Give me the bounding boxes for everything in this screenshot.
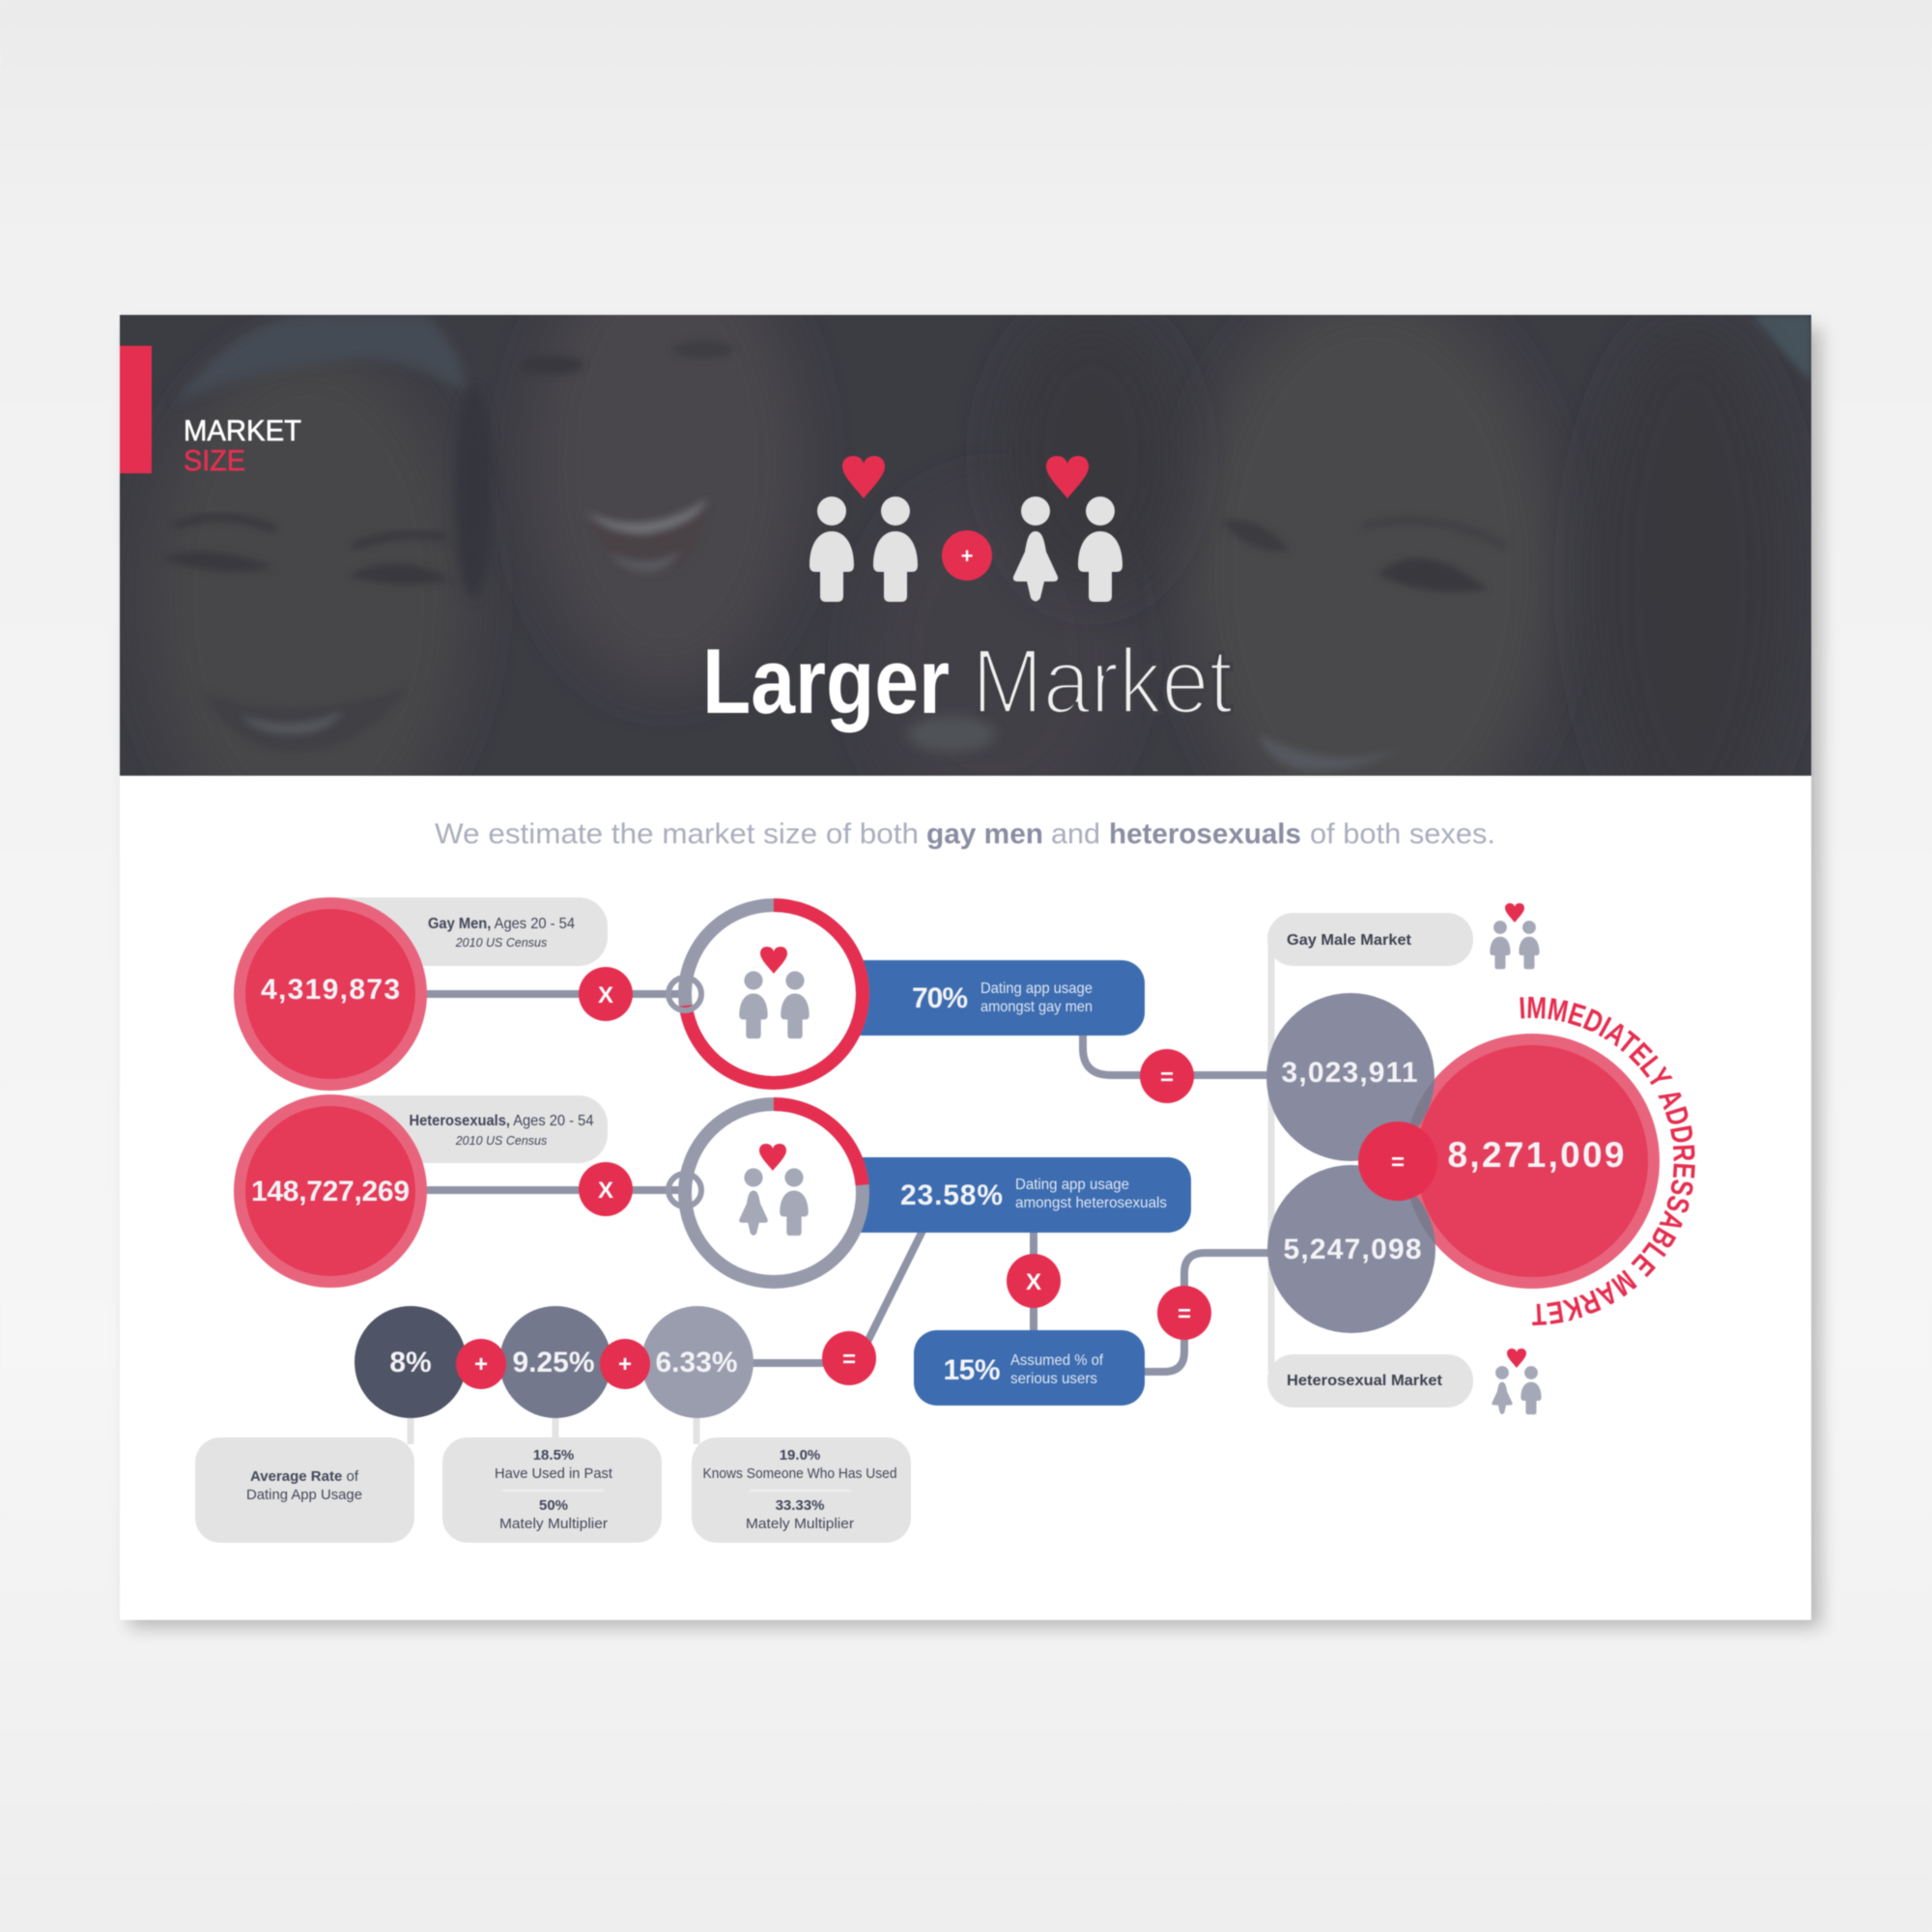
row 1 gray label pill: 2010 US Census xyxy=(455,936,547,950)
title xyxy=(702,630,1233,733)
header icon: couples plus xyxy=(810,456,1122,602)
pill: gay male market xyxy=(1267,913,1473,966)
box: used in past: 50% xyxy=(539,1497,568,1514)
operator: plus 2 xyxy=(600,1339,650,1389)
section label: MARKET xyxy=(184,413,301,447)
donut: heterosexuals 23.58% xyxy=(685,1104,863,1282)
icon: straight couple small xyxy=(1492,1349,1542,1414)
title: Market xyxy=(972,630,1233,733)
subtitle xyxy=(435,818,1495,850)
title: Larger xyxy=(702,630,950,733)
operator: times row 1 xyxy=(579,967,633,1021)
icon: mixed couple xyxy=(739,1168,809,1236)
box: knows someone xyxy=(692,1437,911,1543)
icon: heart xyxy=(759,1144,786,1171)
icon: plus circle: + xyxy=(961,544,973,568)
subtitle: We estimate the market size of both xyxy=(435,818,919,850)
blue bar: 70%: Dating app usage xyxy=(980,980,1093,997)
box: average rate: Average Rate of xyxy=(250,1468,359,1485)
box: average rate xyxy=(195,1437,414,1543)
operator: equals gay men xyxy=(1140,1049,1194,1103)
small link rings xyxy=(668,978,701,1207)
box: used in past: 18.5% xyxy=(533,1447,574,1463)
card xyxy=(120,315,1811,1620)
donut: gay men 70% xyxy=(685,905,863,1083)
operator: equals gay men: = xyxy=(1160,1065,1174,1091)
box: knows someone: 19.0% xyxy=(780,1447,820,1463)
box: used in past: Have Used in Past xyxy=(495,1465,613,1482)
icon: heart right xyxy=(1046,456,1089,498)
operator: equals total: = xyxy=(1391,1150,1405,1176)
blue bar: 23.58%: Dating app usage xyxy=(1015,1177,1129,1193)
box: knows someone: 33.33% xyxy=(776,1497,824,1514)
circle: 3,023,911: 3,023,911 xyxy=(1281,1057,1418,1089)
circle: 148,727,269: 148,727,269 xyxy=(251,1176,410,1208)
rate circle: 6.33% xyxy=(641,1306,753,1418)
circle: total 8,271,009 xyxy=(1416,1045,1648,1277)
operator: equals rates: = xyxy=(842,1347,856,1373)
light vertical bracket xyxy=(1267,947,1275,1372)
circle: 4,319,873: 4,319,873 xyxy=(261,974,400,1006)
blue bar: 70%: 70% xyxy=(912,982,968,1014)
operator: equals hetero: = xyxy=(1178,1301,1191,1327)
big circle outer ring xyxy=(1405,1034,1660,1289)
row 1 gray label pill: Gay Men, Ages 20 - 54 xyxy=(428,916,575,932)
pill: heterosexual market xyxy=(1267,1354,1473,1407)
subtitle: and xyxy=(1051,818,1100,850)
box: used in past: Mately Multiplier xyxy=(499,1516,608,1532)
row 2 gray label pill: 2010 US Census xyxy=(455,1134,547,1148)
operator: times serious users xyxy=(1007,1254,1061,1308)
operator: times row 2 xyxy=(579,1162,633,1216)
icon: heart xyxy=(760,947,787,974)
operator: plus 1 xyxy=(456,1339,506,1389)
icon: straight couple xyxy=(1013,497,1122,602)
overlap tint xyxy=(1410,1080,1435,1244)
subtitle: gay men xyxy=(926,818,1043,850)
section label: SIZE xyxy=(184,443,245,477)
card shadow xyxy=(129,328,1821,1628)
circle: 4,319,873 xyxy=(234,897,427,1091)
header banner photo xyxy=(119,314,1812,777)
operator: times serious users: X xyxy=(1026,1269,1041,1295)
blue bar: 70% xyxy=(831,960,1145,1036)
pill: gay male market: Gay Male Market xyxy=(1287,932,1412,949)
rate circle: 9.25% xyxy=(499,1306,611,1418)
box: knows someone: Knows Someone Who Has Used xyxy=(703,1465,896,1482)
box: average rate: Dating App Usage xyxy=(246,1487,362,1503)
blue bar: 23.58%: 23.58% xyxy=(900,1179,1003,1211)
operator: plus 1: + xyxy=(474,1351,488,1378)
box: knows someone: Mately Multiplier xyxy=(746,1516,854,1532)
operator: times row 1: X xyxy=(598,982,613,1009)
circle: 148,727,269 xyxy=(234,1094,427,1288)
blue bar: 15%: Assumed % of xyxy=(1010,1352,1104,1369)
row 1 gray label pill xyxy=(290,897,608,966)
operator: times row 2: X xyxy=(598,1178,613,1204)
circle: 3,023,911 xyxy=(1266,993,1435,1161)
stems to rate boxes xyxy=(411,1415,696,1444)
section label xyxy=(184,413,301,477)
rate circle: 6.33%: 6.33% xyxy=(655,1347,738,1378)
operator: plus 2: + xyxy=(618,1351,632,1378)
icon: plus circle xyxy=(942,530,992,581)
icon: gay couple small xyxy=(1490,903,1540,969)
row 2 gray label pill: Heterosexuals, Ages 20 - 54 xyxy=(410,1113,594,1129)
row 2 gray label pill xyxy=(290,1095,608,1163)
icon: heart left xyxy=(842,456,885,498)
box: used in past xyxy=(442,1437,662,1543)
blue bar: 23.58% xyxy=(831,1157,1191,1233)
curved label: IMMEDIATELY ADDRESSABLE MARKET xyxy=(1519,996,1696,1326)
pill: heterosexual market: Heterosexual Market xyxy=(1287,1373,1443,1389)
circle: 5,247,098: 5,247,098 xyxy=(1283,1234,1422,1265)
blue bar: 15%: 15% xyxy=(943,1354,1001,1386)
blue bar: 23.58%: amongst heterosexuals xyxy=(1015,1195,1167,1211)
operator: equals rates xyxy=(822,1331,876,1385)
blue bar: 70%: amongst gay men xyxy=(980,999,1093,1015)
subtitle: heterosexuals xyxy=(1109,818,1301,850)
operator: equals total xyxy=(1358,1122,1437,1201)
rate circle: 9.25%: 9.25% xyxy=(512,1347,595,1378)
operator: equals hetero xyxy=(1157,1286,1211,1340)
subtitle: of both sexes. xyxy=(1310,818,1495,850)
blue bar: 15% xyxy=(914,1330,1145,1406)
circle: 5,247,098 xyxy=(1267,1165,1435,1333)
circle: total 8,271,009: 8,271,009 xyxy=(1447,1135,1625,1175)
rate circle: 8% xyxy=(355,1306,467,1418)
icon: male couple xyxy=(739,971,810,1038)
blue bar: 15%: serious users xyxy=(1010,1371,1097,1387)
section marker bar xyxy=(120,346,152,473)
icon: gay couple xyxy=(810,497,918,602)
rate circle: 8%: 8% xyxy=(389,1347,432,1378)
connector lines xyxy=(386,994,1275,1372)
